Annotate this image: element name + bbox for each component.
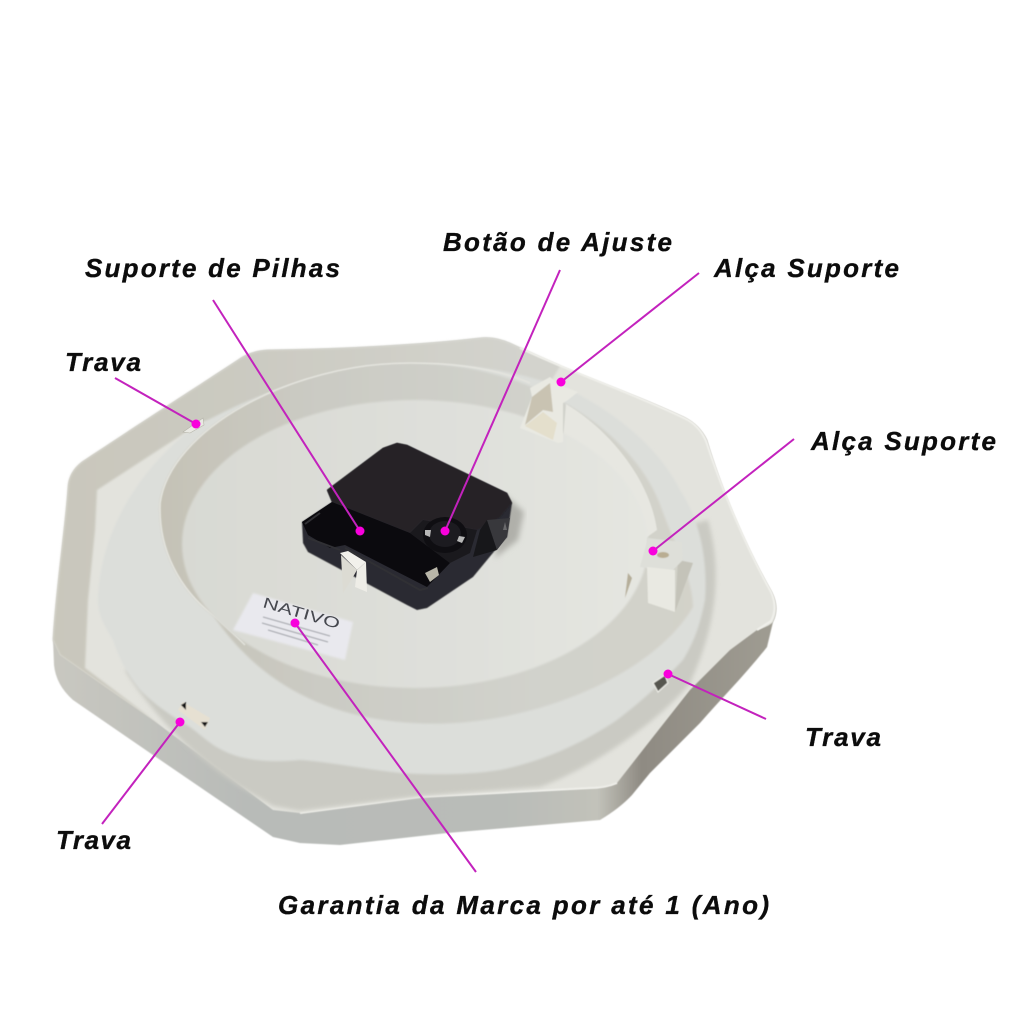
callout: Botão de Ajuste bbox=[440, 227, 672, 536]
callout: Garantia da Marca bbox=[278, 618, 769, 920]
callout: Alça Suporte direita: Alça Suporte bbox=[810, 426, 996, 456]
icon: alça suporte direita bbox=[625, 538, 693, 612]
icon: clock movement bbox=[302, 443, 524, 610]
callout: Alça Suporte superior: Alça Suporte bbox=[713, 253, 899, 283]
inner floor bbox=[182, 400, 648, 688]
battery contact bbox=[425, 567, 439, 582]
logo text: NATIVO bbox=[261, 594, 342, 632]
top surface bbox=[53, 338, 776, 813]
icon: trava inferior esquerda bbox=[178, 702, 210, 730]
callout: Trava superior esquerda: Trava bbox=[65, 347, 141, 377]
callout: Suporte de Pilhas: Suporte de Pilhas bbox=[85, 253, 340, 283]
sliding tab bbox=[341, 555, 357, 593]
icon: trava direita bbox=[653, 675, 668, 692]
icon: alça suporte superior bbox=[520, 377, 578, 443]
top notch trava bbox=[183, 418, 204, 433]
callout: Alça Suporte direita bbox=[648, 426, 996, 556]
panel: clock back housing bbox=[53, 338, 776, 845]
callout: Suporte de Pilhas bbox=[85, 253, 364, 536]
battery compartment bbox=[302, 502, 450, 587]
callout: Trava direita: Trava bbox=[805, 722, 881, 752]
rim highlight bbox=[300, 348, 774, 813]
body bbox=[302, 443, 512, 610]
callout: Trava superior esquerda bbox=[65, 347, 200, 428]
inner ring wall bbox=[160, 363, 693, 724]
shadow bbox=[495, 495, 524, 558]
top face bbox=[327, 443, 512, 533]
mound top surface bbox=[98, 364, 706, 774]
label sticker bbox=[233, 593, 353, 660]
callout: Botão de Ajuste: Botão de Ajuste bbox=[443, 227, 672, 257]
lower shaded band of mound bbox=[125, 520, 716, 811]
dial panel bbox=[410, 520, 477, 563]
callout: Trava inferior esquerda bbox=[56, 718, 184, 855]
callout: Alça Suporte superior bbox=[556, 253, 899, 386]
callout: Trava direita bbox=[664, 670, 881, 752]
callout: Garantia da Marca: Garantia da Marca por até 1 (Ano) bbox=[278, 890, 769, 920]
ring upper right light band bbox=[563, 404, 657, 540]
ring rim highlight bbox=[160, 363, 530, 645]
dial bbox=[423, 517, 467, 553]
callout: Trava inferior esquerda: Trava bbox=[56, 825, 131, 855]
darker rim band left and top bbox=[53, 338, 560, 727]
side clip bbox=[473, 520, 497, 557]
fine print bbox=[262, 617, 330, 645]
outer side wall bbox=[53, 338, 776, 845]
